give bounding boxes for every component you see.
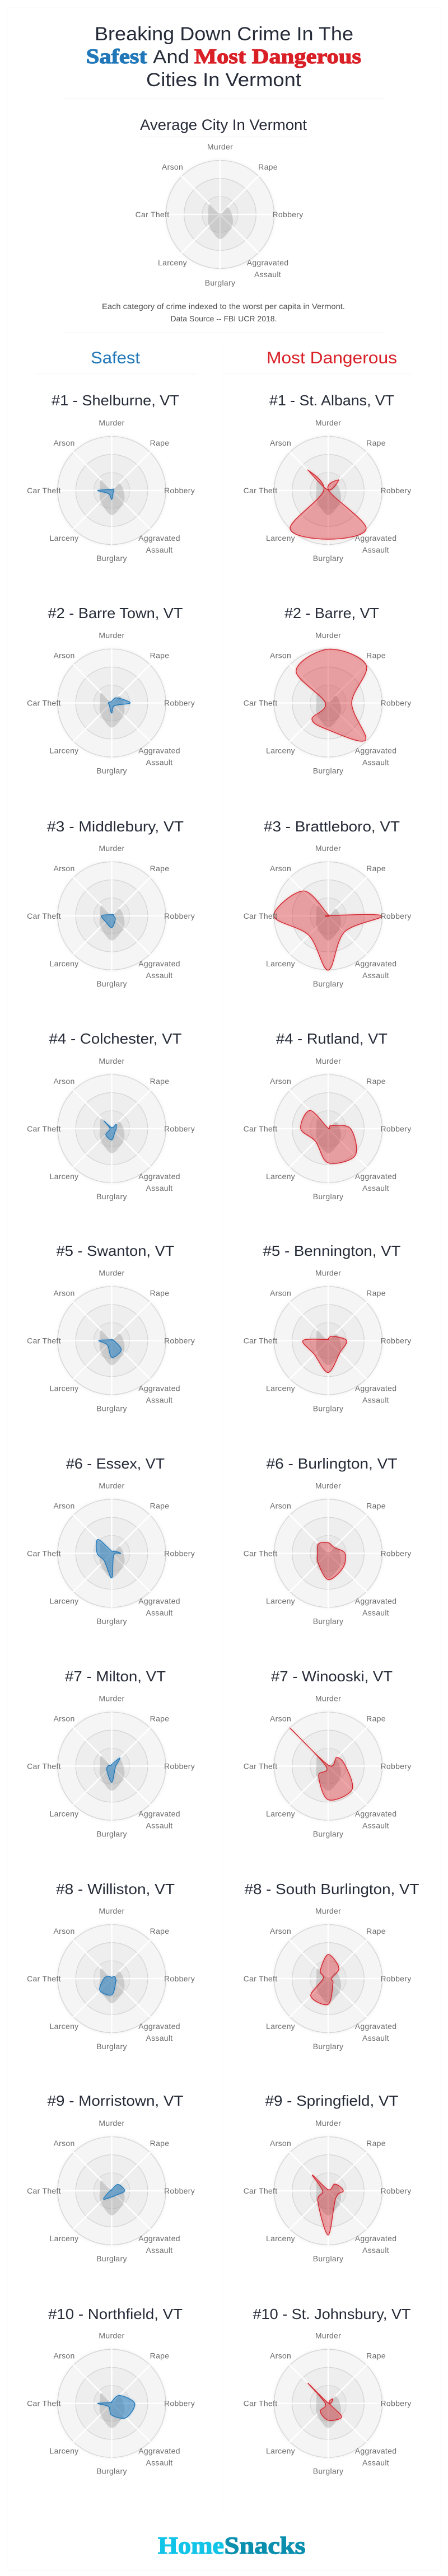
radar chart: St. Johnsbury: Assault xyxy=(362,2458,389,2467)
radar chart: Springfield: Larceny xyxy=(266,2234,295,2243)
radar chart: Williston: Aggravated xyxy=(138,2022,180,2031)
radar chart: Barre Town: Robbery xyxy=(164,699,195,708)
radar chart: Morristown: Larceny xyxy=(50,2234,78,2243)
radar chart: Bennington: Assault xyxy=(362,1395,389,1404)
panel: #1 St. Albans: #1 - St. Albans, VT xyxy=(269,392,394,409)
panel: #6 Burlington: #6 - Burlington, VT xyxy=(267,1455,398,1472)
radar chart: Brattleboro: Arson xyxy=(270,864,291,873)
panel: #7 Milton: #7 - Milton, VT xyxy=(65,1668,166,1685)
radar chart: Swanton: Robbery xyxy=(164,1336,195,1345)
radar chart: Essex: Aggravated xyxy=(138,1596,180,1605)
radar chart: Essex: Murder xyxy=(99,1481,125,1490)
radar chart: Colchester: Murder xyxy=(99,1056,125,1065)
radar chart: Barre: Arson xyxy=(270,651,291,660)
radar chart: Williston xyxy=(27,1906,195,2051)
radar chart: Springfield: Car Theft xyxy=(244,2186,277,2195)
radar chart: Shelburne: Murder xyxy=(99,418,125,427)
radar chart: Northfield: Murder xyxy=(99,2331,125,2340)
radar chart: Rutland: Aggravated xyxy=(355,1172,396,1181)
radar chart: Northfield: Larceny xyxy=(50,2447,78,2456)
title: Breaking Down Crime In The xyxy=(95,24,353,45)
panel: #7 Milton xyxy=(27,1668,195,1839)
radar chart: Middlebury: Arson xyxy=(53,864,75,873)
radar chart: Williston: Burglary xyxy=(96,2042,127,2051)
panel: #10 Northfield xyxy=(27,2306,195,2476)
panel: #7 Winooski: #7 - Winooski, VT xyxy=(271,1668,393,1685)
radar chart: Colchester: Aggravated xyxy=(138,1172,180,1181)
radar chart: Barre Town: Burglary xyxy=(96,766,127,775)
radar chart: Springfield: Arson xyxy=(270,2139,291,2148)
radar chart: Rutland: Rape xyxy=(366,1077,386,1086)
radar chart: South Burlington xyxy=(244,1906,412,2051)
panel: #3 Brattleboro xyxy=(244,818,412,988)
radar chart: Bennington: Car Theft xyxy=(244,1336,277,1345)
panel: #5 Swanton xyxy=(27,1242,195,1413)
radar chart: Milton: Assault xyxy=(146,1821,173,1830)
radar chart: Swanton: Burglary xyxy=(96,1404,127,1413)
radar chart: Morristown: Burglary xyxy=(96,2254,127,2263)
radar chart: Burlington: Rape xyxy=(366,1501,386,1510)
radar chart: Middlebury: Burglary xyxy=(96,979,127,988)
radar chart: Essex: Car Theft xyxy=(27,1549,61,1558)
radar chart: Northfield: Aggravated xyxy=(138,2447,180,2456)
radar chart: Rutland: Larceny xyxy=(266,1172,295,1181)
radar chart: St. Albans: Arson xyxy=(270,438,291,447)
radar chart: Middlebury: Assault xyxy=(146,971,173,980)
radar chart: Barre: Robbery xyxy=(380,699,412,708)
panel: #5 Bennington xyxy=(244,1242,412,1413)
radar chart: St. Albans: Rape xyxy=(366,438,386,447)
radar chart: Burlington: Robbery xyxy=(380,1549,412,1558)
radar chart: South Burlington: Murder xyxy=(315,1906,341,1915)
radar chart: Northfield xyxy=(27,2331,195,2476)
title xyxy=(86,24,361,91)
radar chart: Burlington: Assault xyxy=(362,1608,389,1617)
logo: HomeSnacks: Home xyxy=(158,2533,224,2559)
radar chart: Middlebury: Robbery xyxy=(164,911,195,920)
panel: #4 Colchester: #4 - Colchester, VT xyxy=(49,1030,182,1047)
radar chart: Burlington: Car Theft xyxy=(244,1549,277,1558)
title: And xyxy=(153,46,189,68)
panel: #1 Shelburne xyxy=(27,392,195,563)
radar chart: Morristown: Car Theft xyxy=(27,2186,61,2195)
radar chart: Northfield: Assault xyxy=(146,2458,173,2467)
radar chart: Williston: Arson xyxy=(53,1927,75,1935)
logo: HomeSnacks xyxy=(158,2533,306,2559)
chart: average city radar xyxy=(136,142,304,287)
radar chart: Barre: Larceny xyxy=(266,746,295,755)
radar chart: Bennington xyxy=(244,1268,412,1413)
radar chart: Swanton: Car Theft xyxy=(27,1336,61,1345)
radar chart: Morristown: Arson xyxy=(53,2139,75,2148)
radar chart: St. Johnsbury xyxy=(244,2331,412,2476)
radar chart: Winooski: Rape xyxy=(366,1714,386,1723)
radar chart: Essex: Assault xyxy=(146,1608,173,1617)
radar chart: South Burlington: Assault xyxy=(362,2033,389,2042)
panel: #8 Williston: #8 - Williston, VT xyxy=(56,1881,175,1897)
radar chart: Shelburne: Arson xyxy=(53,438,75,447)
axis labels: Aggravated xyxy=(247,258,288,267)
panel: #9 Springfield: #9 - Springfield, VT xyxy=(265,2092,399,2109)
radar chart: St. Albans: Car Theft xyxy=(244,486,277,495)
radar chart: South Burlington: Robbery xyxy=(380,1974,412,1983)
radar chart: St. Albans: Assault xyxy=(362,545,389,554)
radar chart: Rutland: Assault xyxy=(362,1184,389,1193)
radar chart: Winooski: Assault xyxy=(362,1821,389,1830)
radar chart: Barre Town: Assault xyxy=(146,758,173,767)
radar chart: Colchester: Car Theft xyxy=(27,1124,61,1133)
radar chart: Brattleboro: Murder xyxy=(315,844,341,853)
radar chart: Barre: Assault xyxy=(362,758,389,767)
radar chart: St. Johnsbury: Aggravated xyxy=(355,2447,396,2456)
radar chart: Brattleboro: Rape xyxy=(366,864,386,873)
radar chart: Morristown xyxy=(27,2119,195,2263)
radar chart: Rutland: Murder xyxy=(315,1056,341,1065)
radar chart: Middlebury: Car Theft xyxy=(27,911,61,920)
panel: #7 Winooski xyxy=(244,1668,412,1839)
radar chart: Swanton: Assault xyxy=(146,1395,173,1404)
radar chart: Brattleboro: Larceny xyxy=(266,959,295,968)
radar chart: Springfield xyxy=(244,2119,412,2263)
radar chart: Middlebury: Larceny xyxy=(50,959,78,968)
radar chart: Winooski xyxy=(244,1694,412,1839)
axis labels: Car Theft xyxy=(136,210,169,219)
axis labels: Robbery xyxy=(272,210,304,219)
radar chart: Barre Town: Car Theft xyxy=(27,699,61,708)
panel: #1 St. Albans xyxy=(244,392,412,563)
panel: #5 Swanton: #5 - Swanton, VT xyxy=(56,1242,175,1259)
radar chart: Williston: Murder xyxy=(99,1906,125,1915)
radar chart: St. Johnsbury: Car Theft xyxy=(244,2399,277,2408)
radar chart: Essex: Arson xyxy=(53,1501,75,1510)
radar chart: Rutland: Car Theft xyxy=(244,1124,277,1133)
panel: #4 Rutland xyxy=(244,1030,412,1201)
radar chart: Brattleboro: Car Theft xyxy=(244,911,277,920)
radar chart: St. Johnsbury: Burglary xyxy=(313,2467,343,2476)
radar chart: Essex: Larceny xyxy=(50,1596,78,1605)
radar chart: Winooski: Burglary xyxy=(313,1830,343,1839)
radar chart: Williston: Rape xyxy=(150,1927,169,1935)
panel: #3 Middlebury xyxy=(27,818,195,988)
radar chart: Milton: Rape xyxy=(150,1714,169,1723)
radar chart: Winooski: Larceny xyxy=(266,1810,295,1818)
radar chart: Winooski: Robbery xyxy=(380,1761,412,1770)
radar chart: Milton: Aggravated xyxy=(138,1810,180,1818)
radar chart: Barre Town: Murder xyxy=(99,631,125,640)
radar chart: Swanton: Murder xyxy=(99,1268,125,1277)
title: Most Dangerous xyxy=(194,45,361,68)
radar chart: Morristown: Rape xyxy=(150,2139,169,2148)
radar chart: Bennington: Arson xyxy=(270,1288,291,1297)
radar chart: Barre Town: Rape xyxy=(150,651,169,660)
radar chart: Shelburne xyxy=(27,418,195,563)
panel: #9 Morristown: #9 - Morristown, VT xyxy=(47,2092,184,2109)
radar chart: Barre: Rape xyxy=(366,651,386,660)
radar chart: Essex xyxy=(27,1481,195,1625)
radar chart: Milton: Car Theft xyxy=(27,1761,61,1770)
radar chart: Northfield: Burglary xyxy=(96,2467,127,2476)
radar chart: Brattleboro: Assault xyxy=(362,971,389,980)
text block: data source note xyxy=(102,302,345,323)
radar chart: Middlebury: Rape xyxy=(150,864,169,873)
axis labels: Burglary xyxy=(205,278,235,287)
radar chart: Shelburne: Larceny xyxy=(50,534,78,543)
radar chart: Milton: Larceny xyxy=(50,1810,78,1818)
panel: #2 Barre Town xyxy=(27,605,195,775)
radar chart: Milton xyxy=(27,1694,195,1839)
radar chart: Barre: Car Theft xyxy=(244,699,277,708)
radar chart: Bennington: Murder xyxy=(315,1268,341,1277)
radar chart: Winooski: Aggravated xyxy=(355,1810,396,1818)
radar chart: Burlington: Larceny xyxy=(266,1596,295,1605)
radar chart: Burlington: Murder xyxy=(315,1481,341,1490)
radar chart: Springfield: Assault xyxy=(362,2246,389,2255)
heading: safest column: Safest xyxy=(91,349,141,367)
axis labels: Murder xyxy=(207,142,233,151)
panel: #2 Barre xyxy=(244,605,412,775)
radar chart: Williston: Robbery xyxy=(164,1974,195,1983)
radar chart: Morristown: Murder xyxy=(99,2119,125,2128)
radar chart: Swanton: Arson xyxy=(53,1288,75,1297)
radar chart: St. Albans xyxy=(244,418,412,563)
panel: #8 South Burlington: #8 - South Burlington, VT xyxy=(244,1881,419,1897)
radar chart: Milton: Robbery xyxy=(164,1761,195,1770)
radar chart: Bennington: Robbery xyxy=(380,1336,412,1345)
radar chart: St. Albans: Robbery xyxy=(380,486,412,495)
radar chart: Springfield: Burglary xyxy=(313,2254,343,2263)
radar chart: Bennington: Aggravated xyxy=(355,1383,396,1392)
radar chart: Rutland: Robbery xyxy=(380,1124,412,1133)
panel: #8 South Burlington xyxy=(244,1881,419,2051)
radar chart: Springfield: Aggravated xyxy=(355,2234,396,2243)
radar chart: Morristown: Assault xyxy=(146,2246,173,2255)
panel: #4 Colchester xyxy=(27,1030,195,1201)
radar chart: St. Albans: Murder xyxy=(315,418,341,427)
radar chart: South Burlington: Burglary xyxy=(313,2042,343,2051)
radar chart: Swanton: Aggravated xyxy=(138,1383,180,1392)
radar chart: Colchester xyxy=(27,1056,195,1201)
panel: #9 Morristown xyxy=(27,2092,195,2263)
radar chart: Barre: Murder xyxy=(315,631,341,640)
radar chart: Milton: Arson xyxy=(53,1714,75,1723)
radar chart: Barre xyxy=(244,631,412,775)
radar chart: Middlebury xyxy=(27,844,195,988)
radar chart: South Burlington: Car Theft xyxy=(244,1974,277,1983)
radar chart: South Burlington: Aggravated xyxy=(355,2022,396,2031)
radar chart: Rutland xyxy=(244,1056,412,1201)
logo: HomeSnacks: Snacks xyxy=(224,2533,306,2559)
axis labels: Arson xyxy=(162,162,183,171)
radar chart: South Burlington: Arson xyxy=(270,1927,291,1935)
radar chart: Springfield: Rape xyxy=(366,2139,386,2148)
radar chart: Barre Town xyxy=(27,631,195,775)
radar chart: Swanton: Larceny xyxy=(50,1383,78,1392)
panel: #3 Middlebury: #3 - Middlebury, VT xyxy=(47,818,184,835)
axis labels: Assault xyxy=(254,270,281,279)
panel: #6 Burlington xyxy=(244,1455,412,1625)
radar chart: Northfield: Robbery xyxy=(164,2399,195,2408)
radar chart: St. Albans: Aggravated xyxy=(355,534,396,543)
radar chart: Burlington: Burglary xyxy=(313,1616,343,1625)
radar chart: Winooski: Arson xyxy=(270,1714,291,1723)
radar chart: St. Johnsbury: Murder xyxy=(315,2331,341,2340)
text block: data source note: Data Source -- FBI UCR 2018. xyxy=(170,314,277,323)
radar chart: Bennington: Larceny xyxy=(266,1383,295,1392)
radar chart: Colchester: Burglary xyxy=(96,1192,127,1201)
radar chart: Northfield: Car Theft xyxy=(27,2399,61,2408)
panel: #10 Northfield: #10 - Northfield, VT xyxy=(48,2306,183,2322)
radar chart: Rutland: Arson xyxy=(270,1077,291,1086)
panel: #10 St. Johnsbury xyxy=(244,2306,412,2476)
radar chart: Brattleboro xyxy=(244,844,412,988)
radar chart: St. Albans: Larceny xyxy=(266,534,295,543)
radar chart: Colchester: Larceny xyxy=(50,1172,78,1181)
radar chart: Middlebury: Aggravated xyxy=(138,959,180,968)
radar chart: South Burlington: Larceny xyxy=(266,2022,295,2031)
title: Cities In Vermont xyxy=(146,69,302,91)
radar chart: St. Albans: Burglary xyxy=(313,554,343,563)
panel: #9 Springfield xyxy=(244,2092,412,2263)
radar chart: Shelburne: Aggravated xyxy=(138,534,180,543)
radar chart: Swanton xyxy=(27,1268,195,1413)
radar chart: Williston: Car Theft xyxy=(27,1974,61,1983)
radar chart: Morristown: Robbery xyxy=(164,2186,195,2195)
radar chart: Colchester: Rape xyxy=(150,1077,169,1086)
radar chart: St. Johnsbury: Rape xyxy=(366,2351,386,2360)
radar chart: Milton: Murder xyxy=(99,1694,125,1703)
radar chart: Essex: Robbery xyxy=(164,1549,195,1558)
radar chart: Shelburne: Assault xyxy=(146,545,173,554)
axis labels: Larceny xyxy=(158,258,187,267)
radar chart: Brattleboro: Robbery xyxy=(380,911,412,920)
radar chart: Colchester: Arson xyxy=(53,1077,75,1086)
axis labels xyxy=(136,142,304,287)
radar chart: Essex: Rape xyxy=(150,1501,169,1510)
radar chart: St. Johnsbury: Arson xyxy=(270,2351,291,2360)
radar chart: Essex: Burglary xyxy=(96,1616,127,1625)
radar chart: Northfield: Arson xyxy=(53,2351,75,2360)
radar chart: Burlington: Arson xyxy=(270,1501,291,1510)
panel: #4 Rutland: #4 - Rutland, VT xyxy=(276,1030,388,1047)
radar chart: Bennington: Rape xyxy=(366,1288,386,1297)
radar chart: Shelburne: Rape xyxy=(150,438,169,447)
radar chart: Colchester: Assault xyxy=(146,1184,173,1193)
radar chart: Winooski: Murder xyxy=(315,1694,341,1703)
heading: most dangerous column: Most Dangerous xyxy=(267,349,397,367)
radar chart: Morristown: Aggravated xyxy=(138,2234,180,2243)
panel: #2 Barre Town: #2 - Barre Town, VT xyxy=(48,605,183,621)
panel: #3 Brattleboro: #3 - Brattleboro, VT xyxy=(264,818,400,835)
radar chart: Burlington xyxy=(244,1481,412,1625)
panel: #8 Williston xyxy=(27,1881,195,2051)
radar chart: Colchester: Robbery xyxy=(164,1124,195,1133)
radar chart: Shelburne: Burglary xyxy=(96,554,127,563)
radar chart: St. Johnsbury: Robbery xyxy=(380,2399,412,2408)
title: Safest xyxy=(86,45,147,68)
radar chart: Shelburne: Robbery xyxy=(164,486,195,495)
radar chart: Barre Town: Aggravated xyxy=(138,746,180,755)
panel: #2 Barre: #2 - Barre, VT xyxy=(284,605,379,621)
radar chart: Rutland: Burglary xyxy=(313,1192,343,1201)
radar chart: Shelburne: Car Theft xyxy=(27,486,61,495)
panel: #10 St. Johnsbury: #10 - St. Johnsbury, VT xyxy=(253,2306,411,2322)
text block: data source note: Each category of crime indexed to the worst per capita in Vermont. xyxy=(102,302,345,311)
radar chart: Barre: Aggravated xyxy=(355,746,396,755)
heading: average city: Average City In Vermont xyxy=(140,116,307,133)
radar chart: Brattleboro: Burglary xyxy=(313,979,343,988)
radar chart: Bennington: Burglary xyxy=(313,1404,343,1413)
panel: #6 Essex xyxy=(27,1455,195,1625)
radar chart: Williston: Assault xyxy=(146,2033,173,2042)
radar chart: Milton: Burglary xyxy=(96,1830,127,1839)
radar chart: Brattleboro: Aggravated xyxy=(355,959,396,968)
radar chart: Burlington: Aggravated xyxy=(355,1596,396,1605)
radar chart: Northfield: Rape xyxy=(150,2351,169,2360)
panel: #1 Shelburne: #1 - Shelburne, VT xyxy=(52,392,179,409)
radar chart: Barre Town: Larceny xyxy=(50,746,78,755)
radar chart: St. Johnsbury: Larceny xyxy=(266,2447,295,2456)
radar chart: South Burlington: Rape xyxy=(366,1927,386,1935)
radar chart: Swanton: Rape xyxy=(150,1288,169,1297)
radar chart: Barre: Burglary xyxy=(313,766,343,775)
radar chart: Barre Town: Arson xyxy=(53,651,75,660)
radar chart: Springfield: Robbery xyxy=(380,2186,412,2195)
radar chart: Winooski: Car Theft xyxy=(244,1761,277,1770)
panel: #6 Essex: #6 - Essex, VT xyxy=(66,1455,165,1472)
axis labels: Rape xyxy=(258,162,278,171)
radar chart: Springfield: Murder xyxy=(315,2119,341,2128)
radar chart: Williston: Larceny xyxy=(50,2022,78,2031)
radar chart: Middlebury: Murder xyxy=(99,844,125,853)
panel: #5 Bennington: #5 - Bennington, VT xyxy=(263,1242,401,1259)
